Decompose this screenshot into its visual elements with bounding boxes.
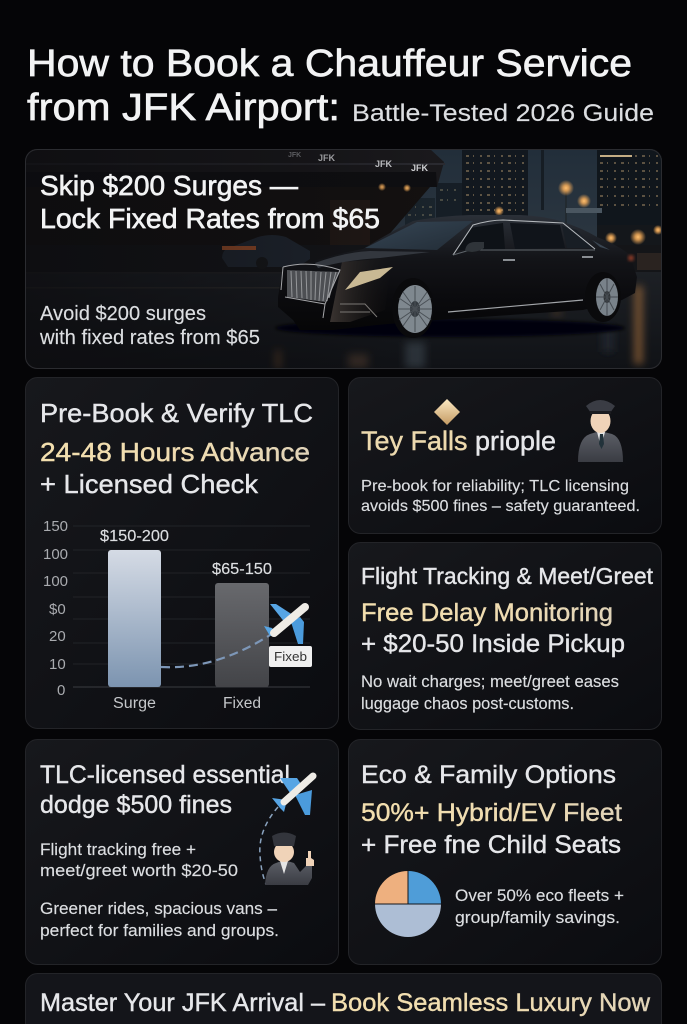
text block	[455, 886, 624, 927]
bar chart: Surge	[113, 695, 156, 712]
title: How to Book a Chauffeur Service	[27, 43, 632, 85]
label: fixed tag: Fixeb	[274, 649, 307, 664]
panel: footer call to action: Book Seamless Luxury Now	[331, 989, 651, 1017]
panel: eco and family options	[348, 740, 662, 964]
terminal building: JFK	[288, 152, 301, 159]
panel heading	[40, 761, 290, 819]
text block: Pre-book for reliability; TLC licensing	[361, 478, 629, 495]
text block: luggage chaos post-customs.	[361, 695, 574, 713]
panel: footer call to action: Master Your JFK Arrival –	[40, 989, 325, 1017]
panel heading	[40, 398, 313, 499]
panel: footer call to action	[26, 974, 662, 1024]
panel: flight tracking and meet/greet	[348, 542, 662, 730]
bar chart: 150	[43, 518, 68, 535]
text block	[361, 673, 619, 713]
hero caption: Avoid $200 surges	[40, 303, 206, 325]
icon: chauffeur	[578, 400, 623, 462]
arrow: dashed flight path	[260, 807, 278, 884]
panel heading	[361, 761, 622, 859]
panel heading: + Licensed Check	[40, 469, 259, 499]
text block: meet/greet worth $20-50	[40, 861, 238, 880]
text block: group/family savings.	[455, 908, 620, 927]
title	[27, 43, 654, 129]
background car	[222, 235, 310, 269]
panel heading: dodge $500 fines	[40, 791, 232, 819]
title: from JFK Airport:	[27, 87, 340, 129]
limousine	[275, 215, 637, 338]
text block: Flight tracking free +	[40, 840, 196, 859]
icon: airplane	[272, 776, 313, 815]
bar chart: Fixed	[223, 695, 261, 712]
text block: avoids $500 fines – safety guaranteed.	[361, 498, 640, 515]
hero caption: with fixed rates from $65	[39, 327, 260, 349]
pie chart	[375, 871, 441, 937]
icon: airplane	[264, 604, 305, 644]
panel heading: + Free fne Child Seats	[361, 831, 621, 859]
text block: perfect for families and groups.	[40, 921, 279, 940]
terminal building: JFK	[375, 159, 393, 169]
terminal building: JFK	[318, 153, 336, 163]
text block	[361, 478, 640, 515]
terminal building: JFK	[411, 163, 429, 173]
bar chart: 100	[43, 573, 68, 590]
text block: Over 50% eco fleets +	[455, 886, 624, 905]
panel heading: 24-48 Hours Advance	[40, 437, 310, 467]
text block: No wait charges; meet/greet eases	[361, 673, 619, 691]
bar chart: $150-200	[100, 528, 169, 545]
bar chart: 0	[57, 682, 65, 699]
panel heading: Eco & Family Options	[361, 761, 616, 789]
terminal building	[86, 150, 445, 245]
panel heading: Flight Tracking & Meet/Greet	[361, 563, 654, 589]
hero heading: Lock Fixed Rates from $65	[40, 203, 380, 234]
panel: TLC-licensed essential	[26, 740, 338, 964]
bar chart: 20	[49, 628, 66, 645]
label: fixed tag	[269, 646, 312, 667]
bar chart: 10	[49, 656, 66, 673]
title: Battle-Tested 2026 Guide	[352, 100, 654, 127]
text block	[40, 840, 279, 940]
bar chart: $0	[49, 601, 66, 618]
hero caption	[39, 303, 260, 349]
panel heading: TLC-licensed essential	[40, 761, 290, 789]
hero heading	[40, 170, 380, 234]
wet road	[242, 272, 661, 316]
panel: hero limousine photo	[25, 149, 663, 369]
bar chart: $65-150	[212, 561, 272, 578]
panel heading: Tey Falls priople	[361, 426, 556, 456]
panel: pre-book and verify with price chart	[26, 378, 338, 728]
arrow: dashed flight path	[161, 635, 270, 667]
bar chart	[43, 518, 310, 712]
icon: chauffeur pointing	[265, 832, 314, 885]
panel heading: Pre-Book & Verify TLC	[40, 398, 313, 428]
skyline	[391, 149, 662, 245]
panel: key principle	[348, 378, 662, 534]
hero heading: Skip $200 Surges —	[40, 170, 298, 201]
icon: gold diamond	[434, 399, 460, 425]
bar chart: 100	[43, 546, 68, 563]
panel heading: Free Delay Monitoring	[361, 599, 613, 627]
panel heading: + $20-50 Inside Pickup	[361, 630, 625, 658]
panel heading	[361, 563, 654, 658]
panel heading: 50%+ Hybrid/EV Fleet	[361, 799, 622, 827]
text block: Greener rides, spacious vans –	[40, 899, 278, 918]
